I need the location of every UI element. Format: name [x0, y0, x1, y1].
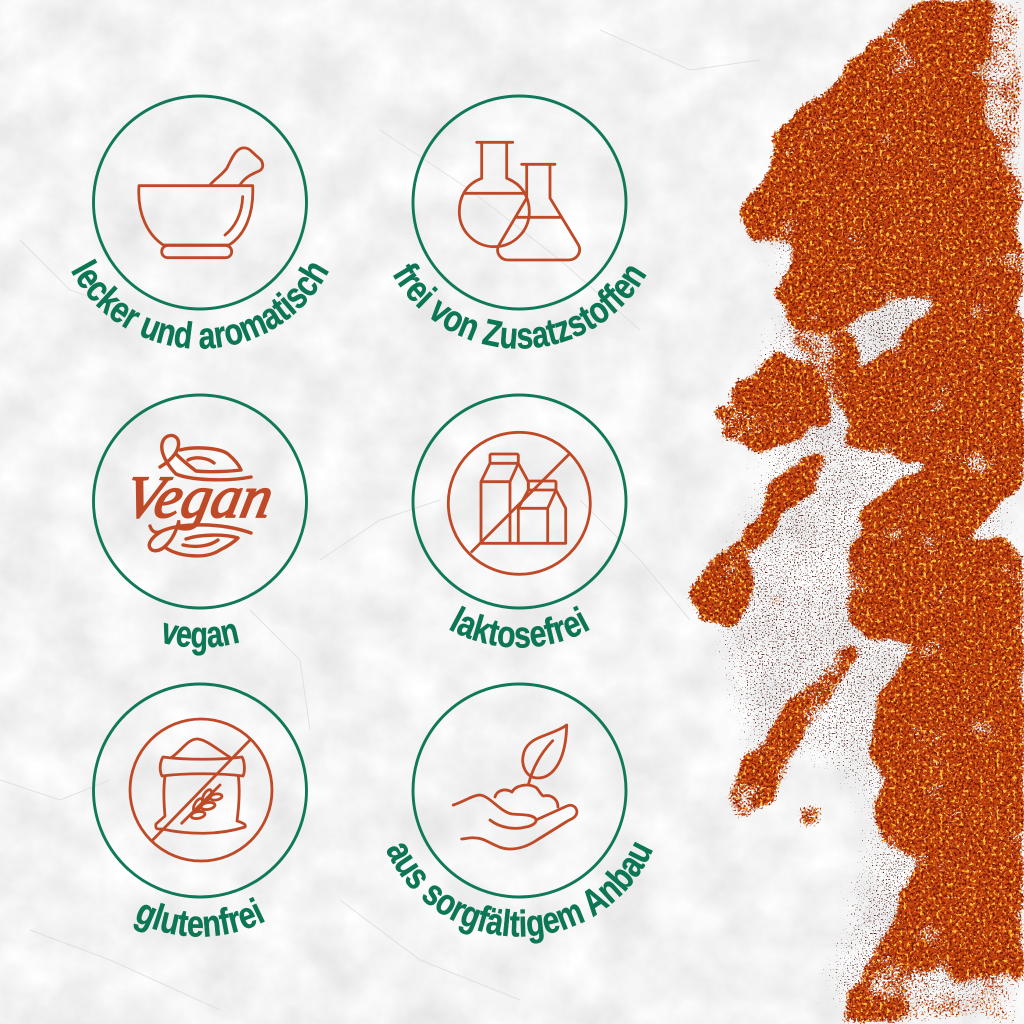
spice powder: scattered dust [690, 0, 1024, 1024]
icon: vegan script logo with leaves [119, 435, 279, 556]
icon: crossed-out grain sack [130, 719, 272, 861]
icon: vegan script logo with leaves: Vegan [119, 465, 279, 531]
icon: laboratory flasks [459, 142, 580, 260]
label: frei von Zusatzstoffen: frei von Zusatzstoffen [393, 263, 646, 349]
label: laktosefrei: laktosefrei [449, 606, 590, 648]
spice powder: main paprika heap [688, 0, 1024, 1024]
badge: vegan [92, 394, 308, 656]
icon: hand holding seedling [453, 725, 577, 849]
label: aus sorgfältigem Anbau: aus sorgfältigem Anbau [386, 842, 653, 944]
badge: glutenfrei [92, 682, 308, 937]
badge: aus sorgfältigem Anbau [386, 682, 653, 944]
label: vegan: vegan [164, 622, 239, 656]
badge: frei von Zusatzstoffen [393, 94, 646, 349]
icon: crossed-out milk cartons [448, 432, 590, 574]
label: glutenfrei: glutenfrei [134, 896, 265, 937]
label: lecker und aromatisch: lecker und aromatisch [71, 258, 329, 350]
icon: mortar and pestle [139, 148, 263, 258]
badge: lecker und aromatisch [71, 94, 329, 350]
badge: laktosefrei [412, 394, 628, 648]
